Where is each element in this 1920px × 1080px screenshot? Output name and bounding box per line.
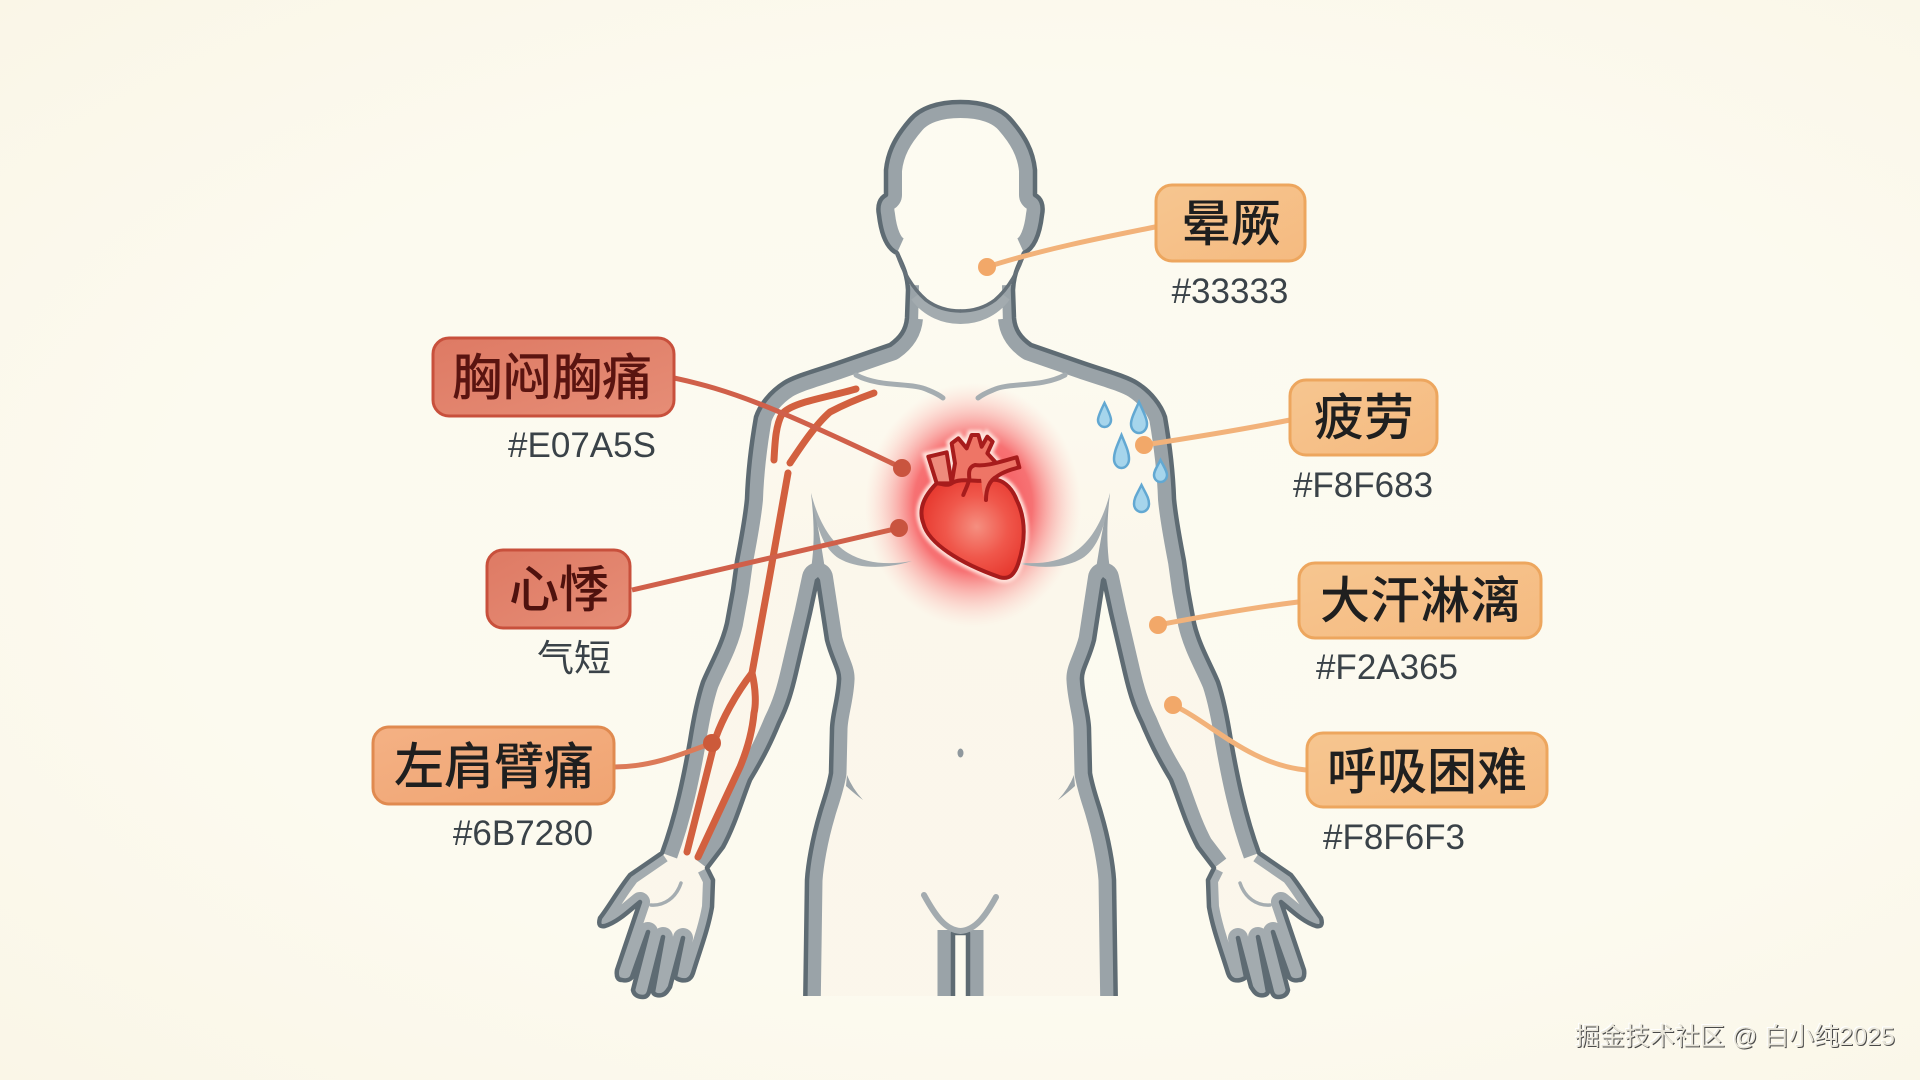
human body outline bbox=[590, 90, 1330, 1020]
label: 胸闷胸痛 bbox=[433, 338, 674, 416]
icon: anatomical heart bbox=[921, 435, 1024, 578]
sublabel: #E07A5S: #E07A5S bbox=[508, 426, 656, 465]
label: 胸闷胸痛: 胸闷胸痛 bbox=[452, 350, 652, 406]
sublabel: #6B7280: #6B7280 bbox=[453, 814, 593, 853]
label: 呼吸困难: 呼吸困难 bbox=[1327, 744, 1527, 800]
label: 心悸: 心悸 bbox=[509, 562, 609, 618]
connector: profuse sweating bbox=[1149, 602, 1298, 634]
label: 左肩臂痛 bbox=[373, 727, 614, 804]
label: 呼吸困难 bbox=[1307, 733, 1547, 807]
sublabel: #F8F6F3: #F8F6F3 bbox=[1323, 818, 1465, 857]
connector: chest pain bbox=[674, 378, 911, 477]
navel bbox=[958, 748, 964, 758]
left arm pain radiation lines bbox=[687, 389, 874, 857]
label: 晕厥 bbox=[1156, 185, 1305, 261]
sublabel: #F2A365: #F2A365 bbox=[1316, 648, 1458, 687]
connector: left arm pain bbox=[614, 734, 721, 767]
sublabel: #F8F683: #F8F683 bbox=[1293, 466, 1433, 505]
watermark: 掘金技术社区 @ 白小纯2025 bbox=[1575, 1023, 1895, 1051]
crotch line bbox=[924, 895, 996, 931]
connector: dyspnea bbox=[1164, 696, 1306, 770]
label: 心悸 bbox=[487, 550, 630, 628]
label: 大汗淋漓 bbox=[1299, 563, 1541, 638]
label: 左肩臂痛: 左肩臂痛 bbox=[394, 739, 594, 795]
sublabel: #33333: #33333 bbox=[1172, 272, 1288, 311]
connector: palpitations bbox=[632, 519, 908, 590]
heart glow bbox=[872, 391, 1074, 619]
connector: fainting bbox=[978, 227, 1155, 276]
sublabel: 气短: 气短 bbox=[537, 638, 611, 679]
sweat drops bbox=[1098, 402, 1167, 512]
infographic canvas bbox=[372, 100, 1895, 1050]
label: 疲劳 bbox=[1290, 380, 1437, 455]
label: 大汗淋漓: 大汗淋漓 bbox=[1320, 573, 1520, 629]
label: 晕厥: 晕厥 bbox=[1181, 196, 1281, 252]
label: 疲劳: 疲劳 bbox=[1314, 390, 1414, 446]
connector: fatigue bbox=[1135, 420, 1290, 454]
